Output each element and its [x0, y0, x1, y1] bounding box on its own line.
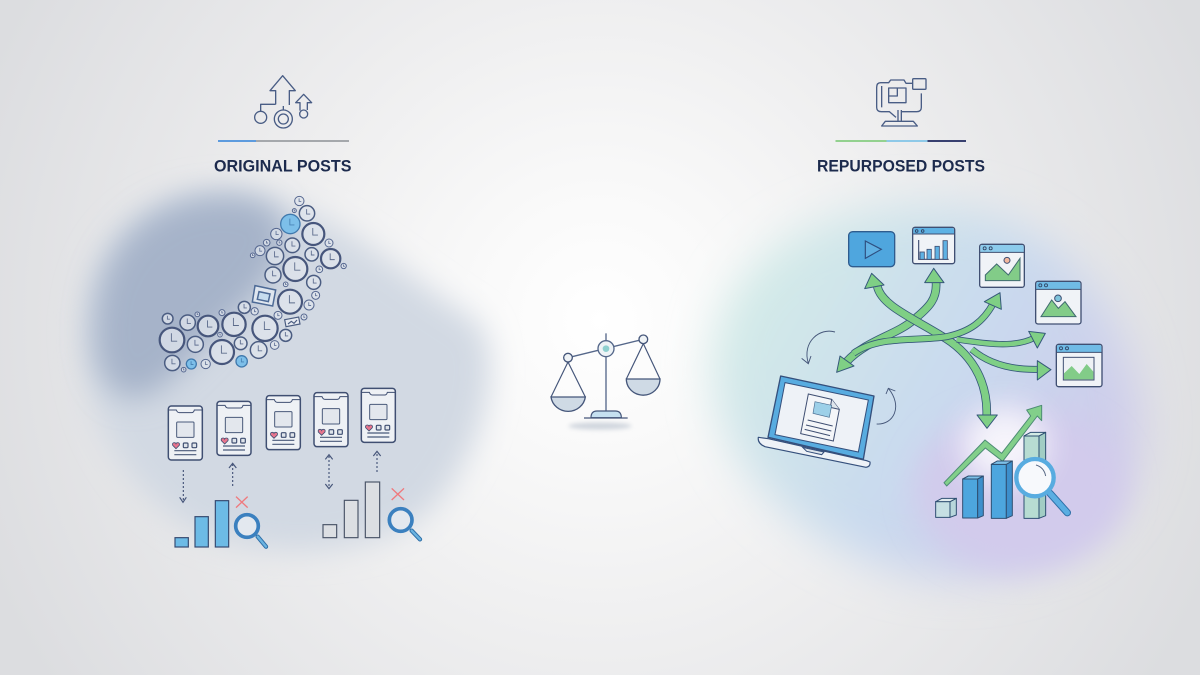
arrow: to landscape window two — [957, 331, 1045, 348]
clock arrow cluster — [160, 196, 346, 372]
arrow: to bar chart window and laptop — [837, 268, 944, 372]
icon: content studio camera — [877, 79, 926, 126]
icon: landscape window three — [1056, 344, 1102, 387]
icon: small chart tile — [285, 317, 300, 327]
grey bar chart with magnifier — [323, 482, 420, 539]
panel: original posts — [160, 76, 420, 547]
analytics chart with magnifier — [936, 405, 1067, 518]
panel: repurposed posts — [758, 79, 1102, 518]
panel: original posts backdrop — [82, 190, 490, 551]
panel: repurposed posts backdrop — [712, 205, 1141, 579]
phone posts row — [168, 388, 395, 460]
icon: laptop with document — [758, 376, 874, 467]
divider — [218, 140, 349, 142]
arrow: to video tile and analytics — [865, 273, 997, 428]
green branching arrows — [837, 268, 1051, 428]
cube — [936, 498, 956, 517]
icon: landscape window one — [980, 244, 1024, 287]
arrow: to landscape window three — [972, 349, 1051, 380]
icon: video tile — [849, 232, 895, 267]
blue bar — [963, 476, 983, 518]
scale shadow — [568, 422, 632, 430]
heading: repurposed posts: REPURPOSED POSTS — [817, 156, 985, 176]
trend arrow — [944, 405, 1042, 486]
icon: cycle arrows around laptop — [802, 331, 896, 424]
icon: landscape window two — [1036, 281, 1081, 324]
divider — [836, 140, 966, 142]
icon: balance scale — [551, 333, 660, 430]
blue bar chart with magnifier — [175, 497, 266, 547]
magnifier — [1016, 459, 1067, 513]
tall blue bar — [991, 461, 1012, 518]
heading: original posts: ORIGINAL POSTS — [214, 156, 352, 176]
icon: bar chart window — [913, 227, 955, 264]
icon: growth arrows and timer — [255, 76, 312, 128]
teal bar — [1024, 432, 1046, 518]
dotted arrows between posts and metrics — [180, 451, 381, 502]
icon: framed image tile — [252, 286, 276, 306]
arrow: to landscape window one — [853, 293, 1001, 353]
